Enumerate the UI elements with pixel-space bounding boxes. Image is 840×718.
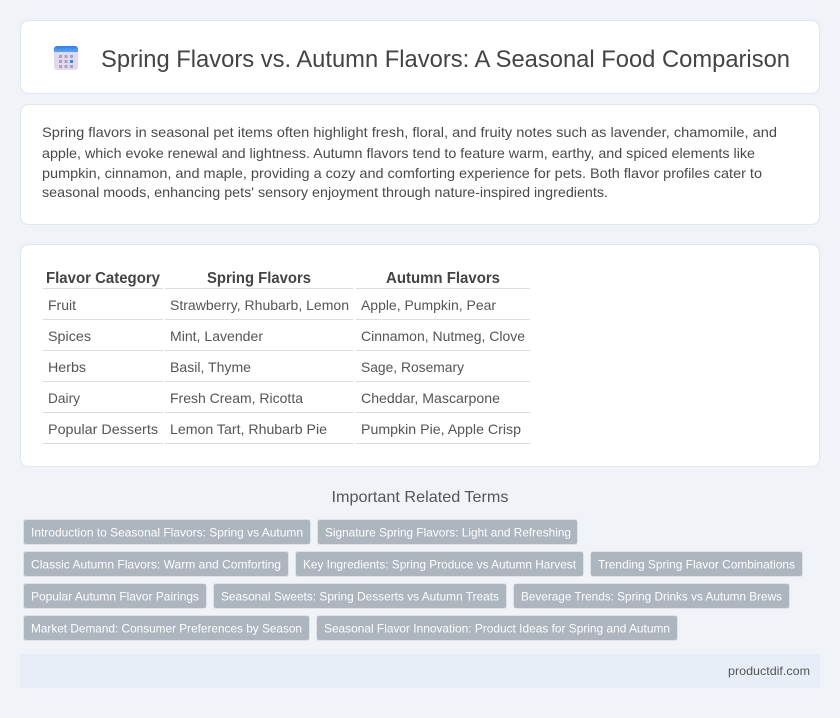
tag: Signature Spring Flavors: Light and Refreshing	[325, 526, 571, 540]
table row: spices: Cinnamon, Nutmeg, Clove	[361, 328, 525, 344]
panel: introduction text: Spring flavors in seasonal pet items often highlight fresh, floral, and fruity notes such as lavender, chamomile, and	[42, 124, 777, 140]
tag	[316, 616, 678, 640]
table header row: Spring Flavors	[207, 270, 311, 287]
table row: herbs	[48, 359, 464, 375]
tag	[318, 520, 578, 544]
tag: Trending Spring Flavor Combinations	[598, 558, 795, 572]
table row: fruit: Fruit	[48, 297, 76, 313]
table row: spices	[48, 328, 525, 344]
table row: herbs: Sage, Rosemary	[361, 359, 464, 375]
tag	[24, 616, 310, 640]
tag	[590, 552, 802, 576]
footer: productdif.com	[728, 664, 810, 678]
table row: popular desserts: Lemon Tart, Rhubarb Pie	[170, 421, 327, 437]
panel: comparison table	[20, 244, 820, 466]
table header row: Flavor Category	[46, 270, 160, 287]
heading: important related terms: Important Related Terms	[332, 489, 508, 506]
table row: herbs: Basil, Thyme	[170, 359, 251, 375]
title: Spring Flavors vs. Autumn Flavors: A Seasonal Food Comparison	[101, 46, 790, 73]
table row: fruit	[48, 297, 496, 313]
panel: introduction text: seasonal moods, enhancing pets' sensory enjoyment through nature-inspired ingredients.	[42, 184, 608, 200]
table row: dairy: Dairy	[48, 390, 80, 406]
table row: dairy: Cheddar, Mascarpone	[361, 390, 500, 406]
tag: Market Demand: Consumer Preferences by Season	[31, 622, 302, 636]
table row: fruit: Strawberry, Rhubarb, Lemon	[170, 297, 349, 313]
table row: popular desserts	[48, 421, 521, 437]
table header row	[46, 270, 500, 287]
tag	[24, 584, 206, 608]
panel: introduction text: pumpkin, cinnamon, and maple, providing a cozy and comforting experience for pets. Both flavor profiles cater to	[42, 165, 762, 181]
tag	[296, 552, 584, 576]
table row: spices: Spices	[48, 328, 91, 344]
tag	[214, 584, 506, 608]
table row: fruit: Apple, Pumpkin, Pear	[361, 297, 496, 313]
panel: introduction text	[20, 104, 820, 224]
tag: Seasonal Sweets: Spring Desserts vs Autumn Treats	[221, 590, 499, 604]
table row: herbs: Herbs	[48, 359, 86, 375]
tag: Introduction to Seasonal Flavors: Spring vs Autumn	[31, 526, 303, 540]
tag: Popular Autumn Flavor Pairings	[31, 590, 199, 604]
tag: Seasonal Flavor Innovation: Product Ideas for Spring and Autumn	[324, 622, 670, 636]
table row: dairy	[48, 390, 500, 406]
table row: dairy: Fresh Cream, Ricotta	[170, 390, 303, 406]
tag: Classic Autumn Flavors: Warm and Comforting	[31, 558, 281, 572]
table row: spices: Mint, Lavender	[170, 328, 263, 344]
tag	[514, 584, 790, 608]
icon: calendar	[54, 46, 78, 70]
table row: popular desserts: Pumpkin Pie, Apple Crisp	[361, 421, 521, 437]
table header row: Autumn Flavors	[386, 270, 500, 287]
tag: Beverage Trends: Spring Drinks vs Autumn Brews	[521, 590, 782, 604]
related term tags	[24, 520, 802, 640]
panel: header	[20, 20, 820, 94]
tag: Key Ingredients: Spring Produce vs Autumn Harvest	[303, 558, 577, 572]
tag	[24, 520, 310, 544]
footer	[20, 654, 820, 688]
table row: popular desserts: Popular Desserts	[48, 421, 158, 437]
panel: introduction text: apple, which evoke renewal and lightness. Autumn flavors tend to feature warm, earthy, and spiced elements like	[42, 145, 755, 161]
tag	[24, 552, 288, 576]
